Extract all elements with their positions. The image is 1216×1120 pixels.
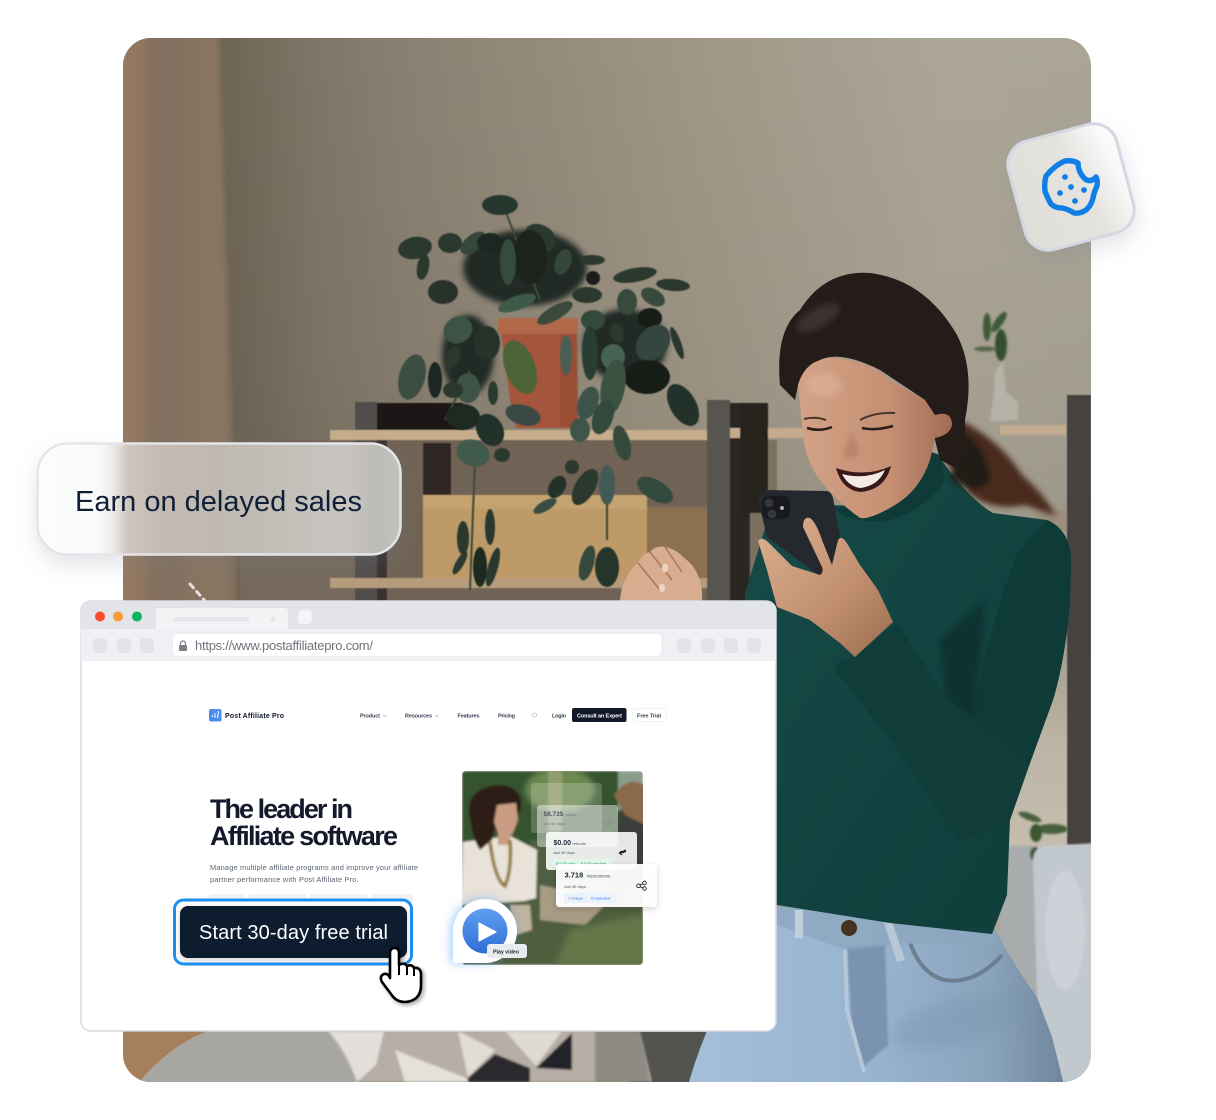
phone	[758, 490, 846, 576]
jeans	[688, 905, 1064, 1085]
heading: Affiliate software	[210, 821, 398, 851]
raised fist	[620, 547, 702, 601]
white dashes	[190, 584, 206, 602]
icon: cookie	[1045, 161, 1097, 213]
icon: hand cursor	[381, 948, 421, 1002]
curtain	[123, 38, 240, 600]
lower right wall, shelf and post	[1000, 395, 1091, 850]
site navigation: Post Affiliate Pro	[225, 713, 284, 720]
hero photo with metric cards	[453, 768, 657, 965]
metric card: refunds: refunds	[572, 841, 586, 846]
metric card: refunds	[546, 832, 637, 870]
site navigation: Pricing	[498, 714, 515, 720]
callout: Earn on delayed sales: Earn on delayed sales	[75, 486, 362, 518]
metric card: impressions: last 30 days	[564, 884, 586, 889]
metric card: impressions: Impressions	[586, 874, 611, 878]
site navigation	[209, 708, 666, 722]
browser chrome	[81, 601, 776, 661]
curly hair	[779, 273, 1056, 516]
callout: Earn on delayed sales	[38, 444, 400, 554]
metric card: refunds: $ 0.00 paid	[556, 862, 575, 866]
feature tags	[209, 894, 413, 904]
metric card: clicks: clicks	[566, 812, 576, 817]
description text	[210, 863, 418, 884]
shelving unit	[240, 400, 805, 615]
browser window	[81, 601, 776, 1031]
metric card: impressions: 3.718	[564, 870, 583, 880]
bottom cushions	[123, 1031, 710, 1082]
play video button: Play video	[493, 950, 519, 956]
far arm	[973, 520, 1071, 763]
sofa and sprig	[1000, 810, 1095, 1086]
button: Start 30-day free trial	[174, 900, 412, 964]
site navigation: Consult an Expert	[577, 714, 622, 720]
metric card: clicks: last 30 days	[544, 821, 565, 826]
badge: cookie icon	[1002, 118, 1140, 256]
site navigation: Features	[458, 714, 480, 720]
site navigation: Resources	[405, 714, 432, 720]
photo: woman laughing at her phone in a living room	[115, 30, 1095, 1086]
plant pot	[498, 318, 578, 428]
metric card: clicks	[537, 805, 618, 847]
heading	[210, 794, 398, 851]
site navigation: Product	[360, 714, 380, 720]
hand holding the phone	[758, 518, 893, 657]
forearm sleeve	[836, 622, 1030, 820]
metric card: faint back card	[531, 783, 602, 833]
green sweater	[745, 450, 1071, 934]
description text: Manage multiple affiliate programs and improve your affiliate	[210, 863, 418, 872]
heading: The leader in	[210, 794, 353, 824]
address bar	[173, 634, 661, 656]
hero photo scene	[462, 768, 650, 965]
metric card: impressions: 0 repeated	[591, 896, 610, 900]
metric card: clicks: 58.735	[544, 811, 564, 818]
knit cushion	[139, 1031, 360, 1082]
metric card: refunds: $0.00	[554, 840, 571, 847]
foliage shadow mass	[442, 230, 667, 395]
hanging plant	[393, 195, 706, 590]
button: Start 30-day free trial: Start 30-day free trial	[199, 922, 388, 944]
wall background	[123, 38, 1091, 1082]
metric card: refunds: $ 0.00 pending	[581, 862, 606, 866]
turtleneck collar	[833, 450, 945, 521]
shadow under arm	[940, 600, 985, 720]
metric card: refunds: last 30 days	[554, 850, 575, 855]
play video button	[453, 899, 527, 963]
patterned pillow	[328, 1031, 652, 1082]
address bar: https://www.postaffiliatepro.com/	[195, 638, 373, 653]
metric card: impressions	[556, 864, 657, 907]
metric card: impressions: 1 unique	[568, 896, 584, 900]
site navigation: Free Trial	[637, 714, 661, 720]
small plant in a glass vase	[974, 310, 1018, 422]
description text: partner performance with Post Affiliate Pro.	[210, 875, 358, 884]
site navigation: Login	[552, 714, 567, 720]
laughing face	[798, 358, 952, 518]
